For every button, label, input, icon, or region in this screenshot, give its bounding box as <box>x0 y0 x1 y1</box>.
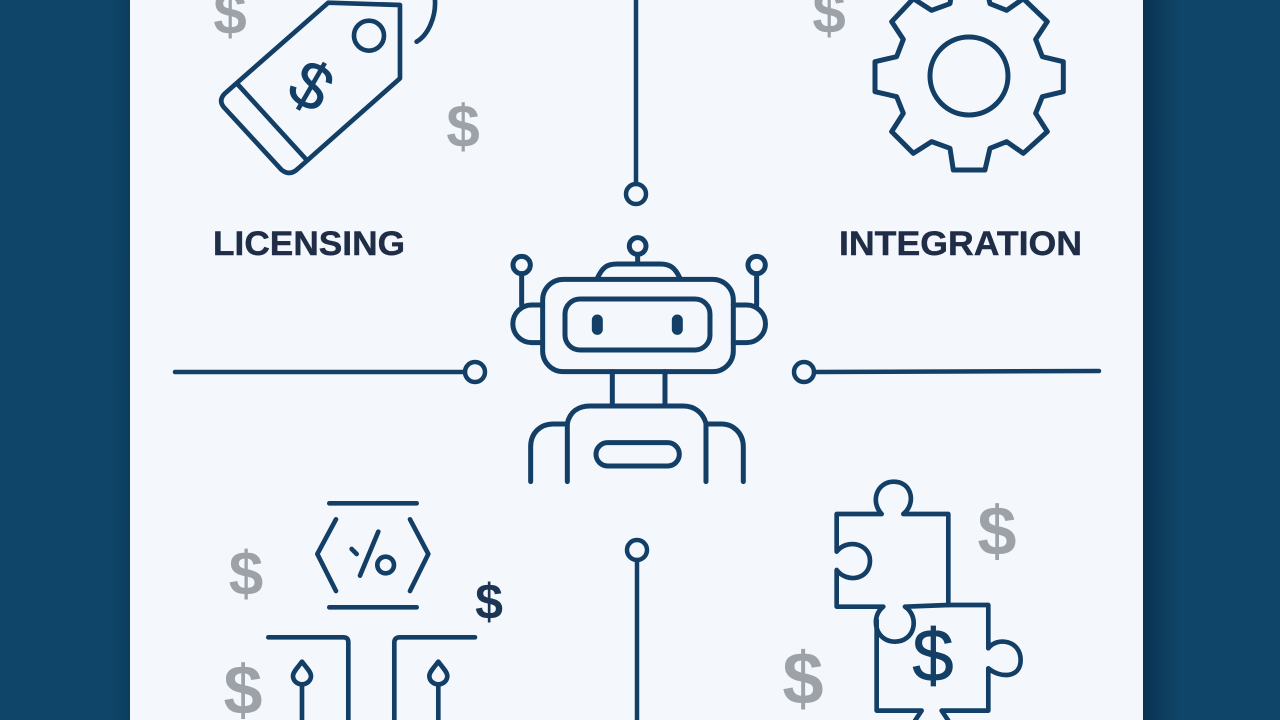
icon: puzzle pieces: $ <box>912 614 954 697</box>
connector: top <box>626 0 646 204</box>
panel: main card <box>130 0 1143 720</box>
heading: integration: INTEGRATION <box>839 225 1082 263</box>
heading: licensing: LICENSING <box>213 225 405 263</box>
connector: left <box>175 362 485 382</box>
icon: puzzle pieces <box>837 482 1021 720</box>
icon: grey dollar signs <box>213 0 1016 720</box>
icon: price tag: $ <box>277 44 346 127</box>
icon: grey dollar signs: $ <box>782 637 824 720</box>
icon: price tag <box>221 0 435 173</box>
icon: robot <box>513 238 765 482</box>
connector: right <box>794 362 1099 382</box>
icon: dark dollar sign: $ <box>475 574 503 630</box>
icon: gear <box>875 0 1063 170</box>
connector: bottom <box>627 540 647 720</box>
icon: grey dollar signs: $ <box>446 93 480 160</box>
icon: grey dollar signs: $ <box>229 540 263 609</box>
icon: percent hexagon and pricing brackets <box>268 503 475 720</box>
icon: grey dollar signs: $ <box>978 492 1016 570</box>
